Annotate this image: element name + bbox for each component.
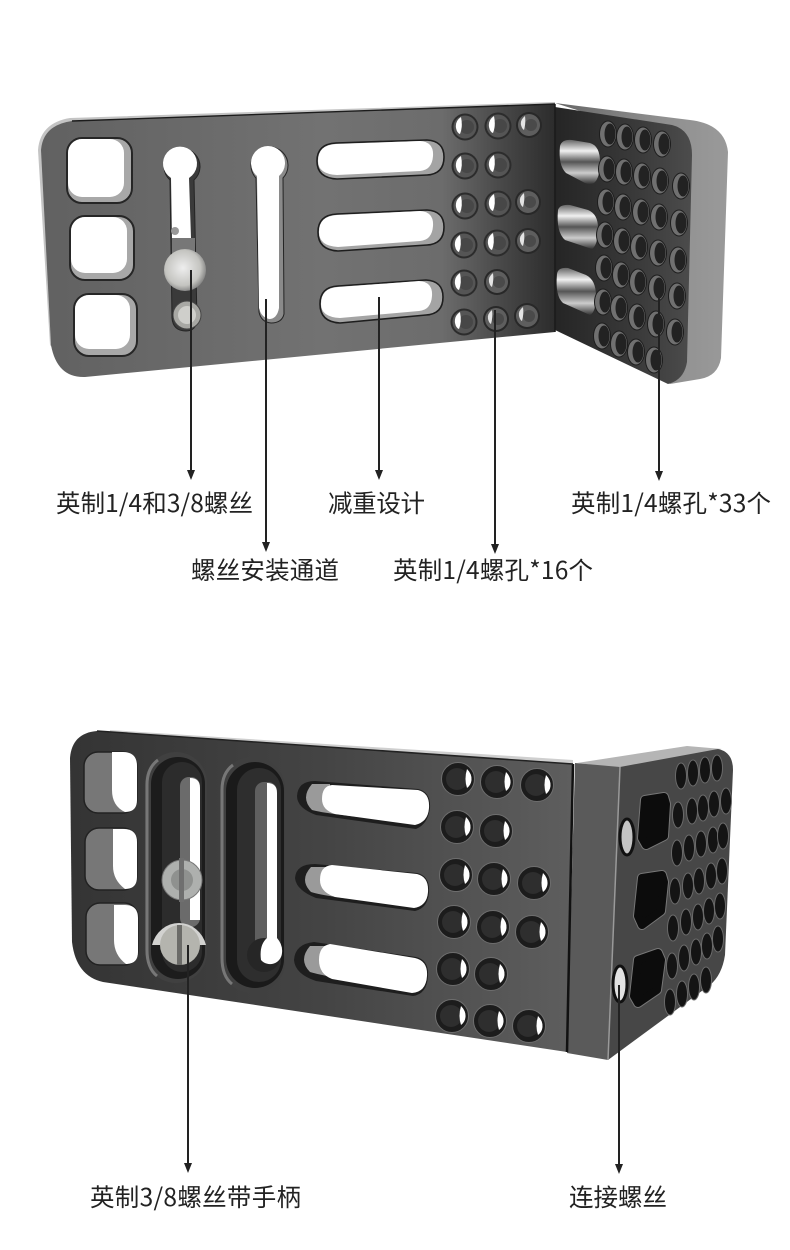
white slit 1 (180, 777, 200, 927)
dark oblong holes (634, 797, 666, 1003)
white slit 2 (255, 782, 277, 962)
arrow: connecting screws (615, 985, 623, 1174)
silver bevel of main plate (38, 102, 555, 350)
arrow: weight reduction (375, 297, 383, 480)
keyhole slot 2 (251, 147, 288, 323)
label: 1/4 and 3/8 screws: 英制1/4和3/8螺丝 (56, 485, 253, 520)
label: screw channel: 螺丝安装通道 (191, 552, 339, 587)
screws and handle (152, 858, 206, 965)
connector holes (557, 140, 600, 315)
threaded holes, main plate (452, 114, 478, 140)
face edge highlight (608, 767, 620, 1060)
label: 3/8 screw with handle: 英制3/8螺丝带手柄 (90, 1179, 301, 1214)
inner corner seam (554, 104, 556, 332)
right plate side edge (555, 103, 728, 384)
recessed channel 2 (220, 757, 285, 993)
arrow: 3/8 screw with handle (184, 945, 192, 1173)
arrow: screw channel (262, 299, 270, 552)
label: weight reduction: 减重设计 (328, 485, 425, 520)
threaded holes, main plate (442, 762, 474, 796)
top edge line (72, 104, 555, 121)
right outer face (608, 749, 733, 1060)
arrow: 1/4 and 3/8 screws (187, 270, 195, 480)
arrow: 33 holes (655, 280, 663, 481)
main plate (70, 731, 573, 1052)
threaded holes, right face (676, 763, 686, 789)
right plate front face (555, 107, 692, 384)
square cut-outs (67, 138, 137, 356)
connecting screws (620, 819, 634, 855)
handle knob and screw (164, 227, 206, 329)
lightening slots (317, 140, 444, 323)
square cut-outs (84, 752, 138, 965)
main plate (41, 104, 555, 377)
plate seam and top edge (567, 764, 573, 1052)
silver top highlight (110, 730, 573, 764)
label: 33 holes: 英制1/4螺孔*33个 (571, 485, 771, 520)
threaded holes, right plate (599, 120, 617, 148)
lightening slots (294, 781, 430, 996)
product photo: bottom bracket (70, 730, 733, 1060)
product photo: top bracket (38, 102, 728, 384)
recessed channel 1 (145, 752, 207, 983)
top sliver (577, 746, 722, 768)
arrow: 16 holes (491, 310, 499, 554)
middle corner face (567, 763, 620, 1060)
label: 16 holes: 英制1/4螺孔*16个 (393, 552, 593, 587)
label: connecting screws: 连接螺丝 (569, 1179, 667, 1214)
keyhole slot 1 (164, 149, 200, 331)
